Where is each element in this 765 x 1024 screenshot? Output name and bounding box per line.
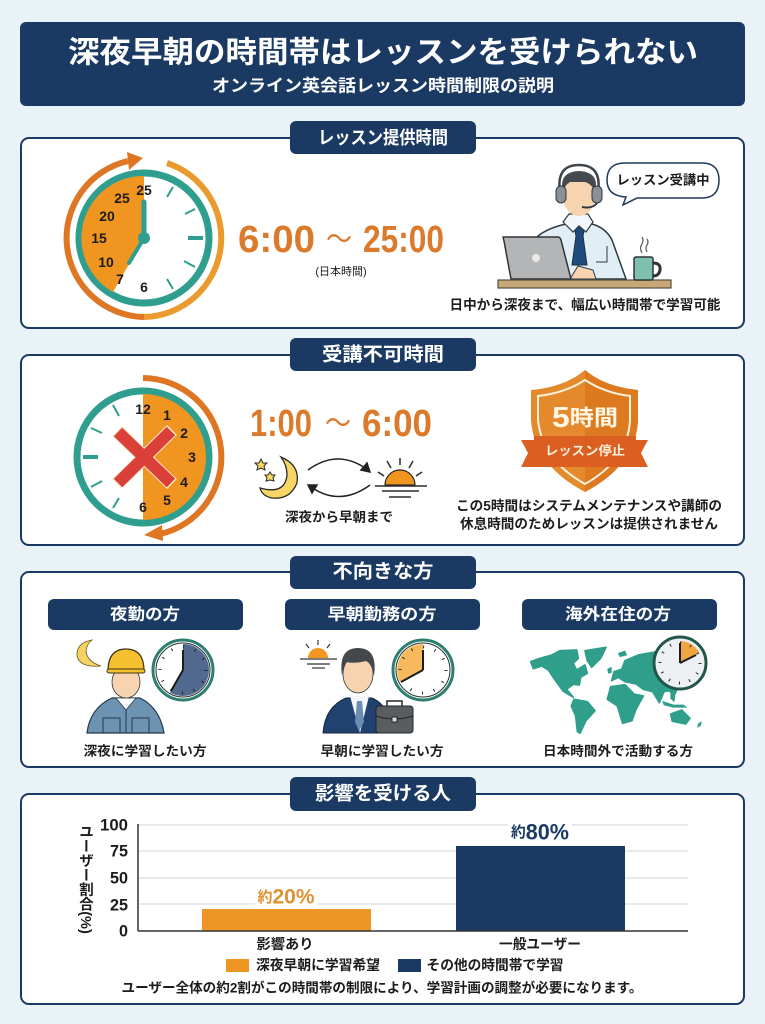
icon: clock with red cross [77,378,221,541]
icon: crescent moon [77,640,101,666]
heading: lesson hours: レッスン提供時間 [318,127,448,148]
bar chart: 50 [110,868,128,888]
icon: business person with briefcase [323,648,413,733]
icon: clock 6:00 to 25:00: 20 [99,208,115,224]
bar chart: 0 [119,922,128,940]
panel: unsuited people [21,556,744,767]
icon: clock 6:00 to 25:00: 10 [98,254,114,270]
bar chart [77,816,688,952]
icon: clock 6:00 to 25:00: 25 [136,182,152,198]
icon: clock with red cross: 3 [188,449,196,465]
bar chart: 75 [110,842,128,860]
icon: clock 6:00 to 25:00: 7 [116,271,124,287]
panel: unavailable hours [21,338,744,545]
bar: affected [202,909,371,931]
icon: world map [531,647,702,733]
bar: general users [456,846,625,931]
icon: clock 6:00 to 25:00 [67,152,221,317]
arrows: night to morning cycle [308,459,370,497]
ribbon label: レッスン停止 [545,443,625,458]
value: about 80%: 約80% [511,820,569,844]
icon: small sunrise [300,640,337,668]
legend: その他の時間帯で学習 [426,957,564,973]
icon: person at laptop [498,165,671,288]
time range [250,403,432,445]
heading: unsuited people: 不向きな方 [332,560,434,582]
icon: moon and stars [255,457,297,498]
legend: 深夜早朝に学習希望 [256,957,380,973]
icon: clock with red cross: 12 [135,401,151,417]
column: night workers [48,599,243,758]
panel: affected people [21,777,744,1004]
icon: clock 6:00 to 25:00: 6 [140,279,148,295]
bar chart: 影響あり [256,936,314,952]
caption: overseas residents: 日本時間外で活動する方 [543,744,693,758]
shield label: 5時間 [552,402,618,434]
heading: unavailable hours [290,338,476,371]
icon: clock with red cross: 5 [163,492,171,508]
subtitle: オンライン英会話レッスン時間制限の説明 [212,76,554,96]
value: about 20%: 約20% [258,886,315,908]
caption: why lessons stop: この5時間はシステムメンテナンスや講師の [456,498,722,514]
icon: 5 hours shield [521,370,648,492]
column: early workers: 早朝勤務の方 [328,604,436,624]
caption: night to morning: 深夜から早朝まで [285,510,393,524]
heading: lesson hours [290,121,476,154]
title: 深夜早朝の時間帯はレッスンを受けられない [68,36,698,70]
axis title: ユーザー割合(%) [77,824,93,934]
caption: why lessons stop [456,498,722,532]
time range: 〜 [325,408,351,440]
column: early workers [285,599,480,758]
caption: lesson hours: 日中から深夜まで、幅広い時間帯で学習可能 [450,296,721,312]
time range: 6:00 [238,219,315,261]
column: night workers: 夜勤の方 [110,604,180,624]
column: overseas residents [522,599,717,758]
bar chart: 一般ユーザー [499,936,581,952]
heading: unavailable hours: 受講不可時間 [322,342,444,366]
header banner [20,22,745,106]
time range: 〜 [326,224,352,256]
icon: overseas clock [654,637,706,689]
icon: clock with red cross: 6 [139,499,147,515]
time range: 1:00 [250,403,312,445]
heading: unsuited people [290,556,476,589]
footnote: ユーザー全体の約2割がこの時間帯の制限により、学習計画の調整が必要になります。 [122,980,642,996]
callout: in lesson: レッスン受講中 [616,172,710,188]
caption: why lessons stop: 休息時間のためレッスンは提供されません [460,516,718,532]
heading: affected people [290,777,476,811]
time range [238,219,444,261]
icon: night clock [153,640,213,700]
time zone note: (日本時間) [315,264,367,278]
icon: worker with helmet [87,649,164,733]
bar chart: 100 [100,816,128,834]
icon: clock 6:00 to 25:00: 25 [114,190,130,206]
callout: in lesson [607,163,719,205]
bar chart: 25 [110,896,128,914]
legend [226,957,564,973]
icon: clock with red cross: 4 [180,474,188,490]
time range: 25:00 [363,219,444,261]
caption: night workers: 深夜に学習したい方 [84,744,206,758]
heading: affected people: 影響を受ける人 [315,782,451,804]
caption: early workers: 早朝に学習したい方 [320,744,444,758]
icon: sunrise [375,458,427,497]
icon: morning clock [393,640,453,700]
icon: clock 6:00 to 25:00: 15 [91,230,107,246]
time range: 6:00 [362,403,432,445]
icon: clock with red cross: 2 [180,425,188,441]
column: overseas residents: 海外在住の方 [565,604,671,624]
icon: clock with red cross: 1 [163,407,171,423]
panel: lesson hours [21,121,744,328]
